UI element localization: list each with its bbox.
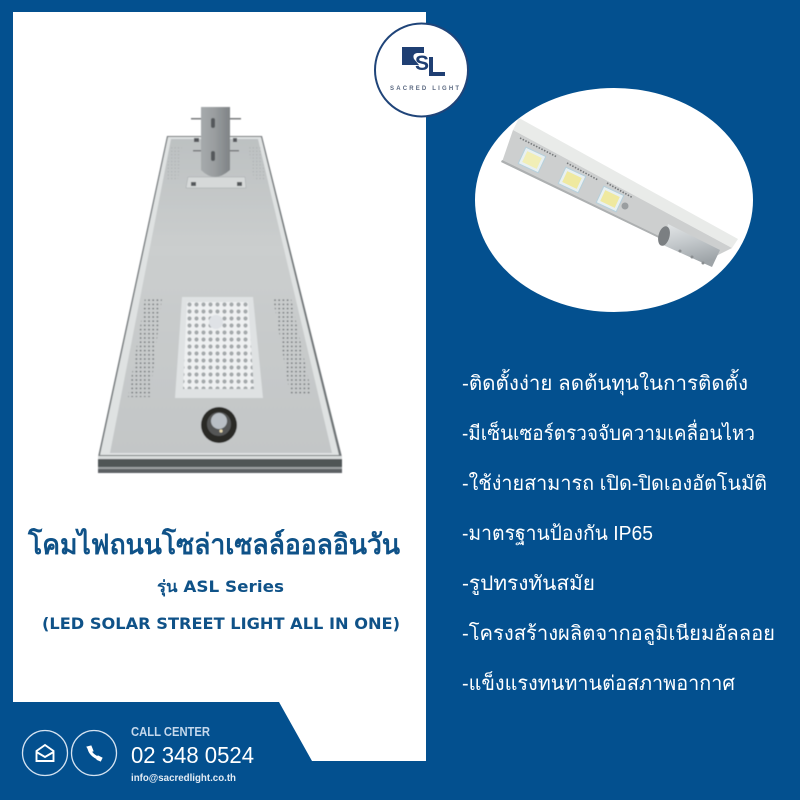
oval product image [475, 88, 753, 312]
email: info@sacredlight.co.th [131, 772, 236, 784]
feature 7: -แข็งแรงทนทานต่อสภาพอากาศ [462, 670, 735, 695]
lamp front edge [98, 456, 342, 473]
logo mark: S [415, 52, 429, 75]
bracket opening [656, 225, 672, 247]
footer contact [22, 724, 254, 784]
icon: phone [72, 730, 116, 776]
call center label: CALL CENTER [131, 724, 211, 739]
feature list [462, 369, 775, 695]
small sensor [622, 202, 628, 210]
lamp outer frame [98, 136, 342, 473]
vent rows [520, 138, 633, 198]
feature 2: -มีเซ็นเซอร์ตรวจจับความเคลื่อนไหว [462, 419, 755, 445]
LED chip 1 [518, 147, 546, 173]
white product panel [13, 12, 426, 761]
title [27, 527, 400, 633]
lamp silver rim [100, 137, 339, 455]
right vent dots [273, 298, 312, 395]
model line: รุ่น ASL Series [157, 577, 284, 597]
motion sensor [201, 407, 237, 443]
pole slots [211, 118, 215, 161]
phone number: 02 348 0524 [131, 742, 254, 768]
icon: email [22, 730, 68, 776]
LED module [175, 297, 263, 398]
pole cross bars [191, 118, 241, 152]
top vent grilles [166, 146, 266, 180]
lamp lower edge [501, 160, 663, 240]
english subtitle: (LED SOLAR STREET LIGHT ALL IN ONE) [42, 614, 400, 633]
white oval [475, 88, 753, 312]
left vent dots [128, 298, 162, 397]
lamp top strip [513, 118, 738, 248]
feature 6: -โครงสร้างผลิตจากอลูมิเนียมอัลลอย [462, 622, 775, 646]
lamp face [110, 139, 332, 453]
main heading: โคมไฟถนนโซล่าเซลล์ออลอินวัน [27, 527, 400, 560]
bracket bolts [678, 250, 704, 264]
pole mount base plate [186, 177, 246, 188]
mounting bracket [663, 224, 720, 267]
LED chip 3 [596, 186, 624, 212]
feature 4: -มาตรฐานป้องกัน IP65 [462, 523, 653, 545]
pole bolts [191, 138, 242, 186]
feature 1: -ติดตั้งง่าย ลดต้นทุนในการติดตั้ง [462, 369, 748, 396]
logo badge [375, 24, 468, 116]
main product photo: solar street light [98, 107, 342, 473]
logo circle [375, 24, 468, 116]
LED chip 2 [558, 167, 586, 193]
feature 3: -ใช้ง่ายสามารถ เปิด-ปิดเองอัตโนมัติ [462, 472, 767, 495]
logo wordmark: SACRED LIGHT [390, 86, 459, 92]
lamp underside [502, 130, 732, 256]
feature 5: -รูปทรงทันสมัย [462, 573, 595, 596]
pole bracket [201, 107, 230, 177]
